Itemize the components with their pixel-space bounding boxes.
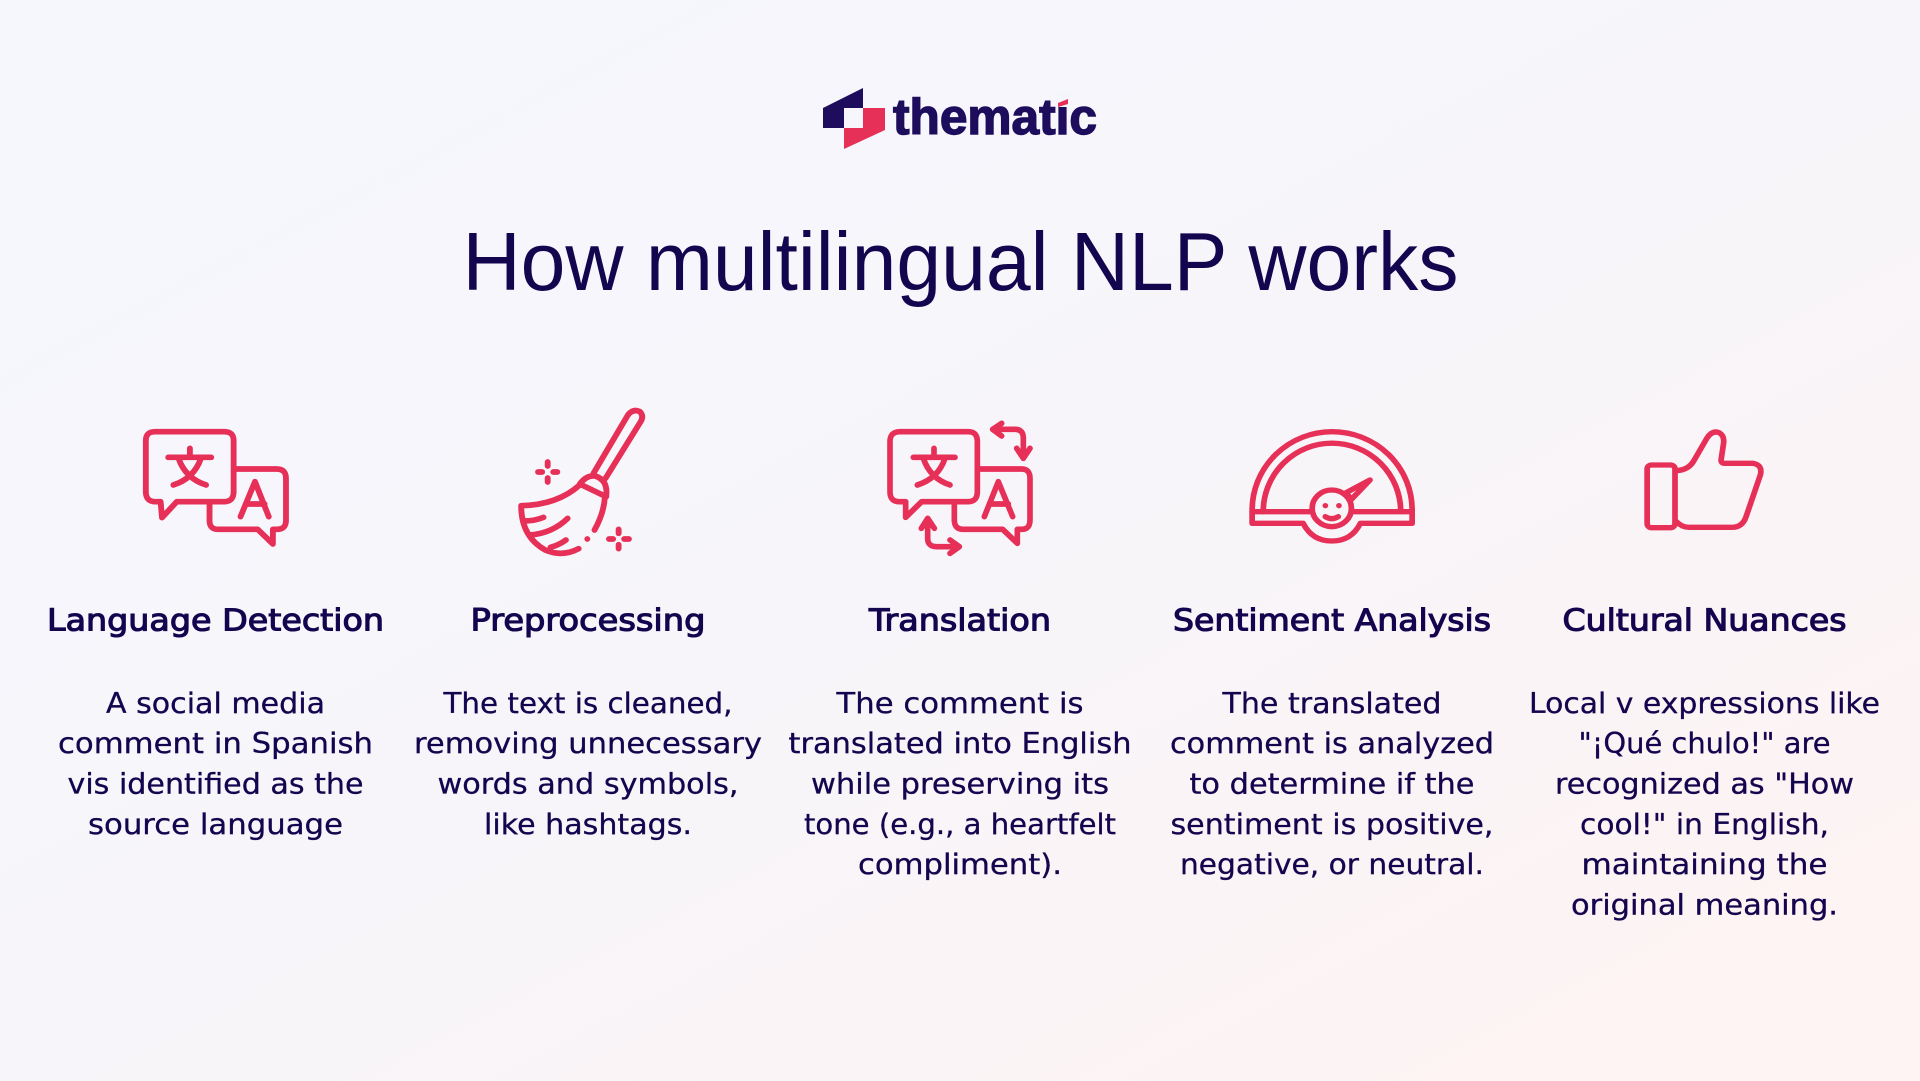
description: removing unnecessary: [414, 727, 762, 760]
description: source language: [88, 808, 343, 841]
description: negative, or neutral.: [1180, 848, 1484, 881]
heading: Preprocessing: [470, 604, 706, 638]
description: The comment is: [835, 687, 1084, 720]
description: maintaining the: [1582, 848, 1828, 881]
description: compliment).: [858, 848, 1062, 881]
heading: Sentiment Analysis: [1173, 604, 1491, 638]
description: comment is analyzed: [1170, 727, 1494, 760]
description: [788, 687, 1132, 881]
description: The translated: [1221, 687, 1442, 720]
description: "¡Qué chulo!" are: [1578, 727, 1830, 760]
logo wordmark: thematic: [893, 89, 1097, 145]
title: How multilingual NLP works: [462, 215, 1458, 308]
description: like hashtags.: [484, 808, 692, 841]
heading: Translation: [868, 604, 1051, 638]
description: comment in Spanish: [58, 727, 373, 760]
description: Local v expressions like: [1529, 687, 1880, 720]
panel: translation: [788, 423, 1132, 881]
panel: sentiment analysis: [1170, 432, 1494, 881]
panel: language detection: [47, 432, 384, 841]
heading: Cultural Nuances: [1562, 604, 1846, 638]
icon: sentiment gauge: [1252, 432, 1412, 541]
description: original meaning.: [1571, 888, 1838, 922]
description: [1170, 687, 1494, 881]
description: [414, 687, 762, 841]
description: A social media: [106, 687, 325, 720]
description: translated into English: [788, 727, 1132, 760]
heading: Language Detection: [47, 604, 384, 638]
description: sentiment is positive,: [1170, 808, 1494, 841]
description: The text is cleaned,: [442, 687, 732, 720]
panel: preprocessing: [414, 411, 762, 841]
description: to determine if the: [1190, 768, 1474, 800]
description: while preserving its: [811, 768, 1109, 800]
icon: translation with arrows: [890, 423, 1030, 553]
icon: thumbs up: [1647, 432, 1761, 528]
description: [1529, 687, 1880, 922]
logo accent: [1058, 99, 1068, 107]
description: recognized as "How: [1555, 768, 1854, 800]
description: cool!" in English,: [1580, 808, 1829, 841]
icon: translate bubbles: [146, 432, 286, 544]
panel: cultural nuances: [1529, 432, 1880, 922]
description: [58, 687, 373, 841]
logo: thematic: [823, 88, 1097, 149]
description: tone (e.g., a heartfelt: [804, 808, 1116, 841]
description: words and symbols,: [438, 768, 738, 800]
description: vis identified as the: [68, 768, 364, 800]
logo mark: [823, 88, 885, 149]
icon: broom: [521, 411, 642, 553]
